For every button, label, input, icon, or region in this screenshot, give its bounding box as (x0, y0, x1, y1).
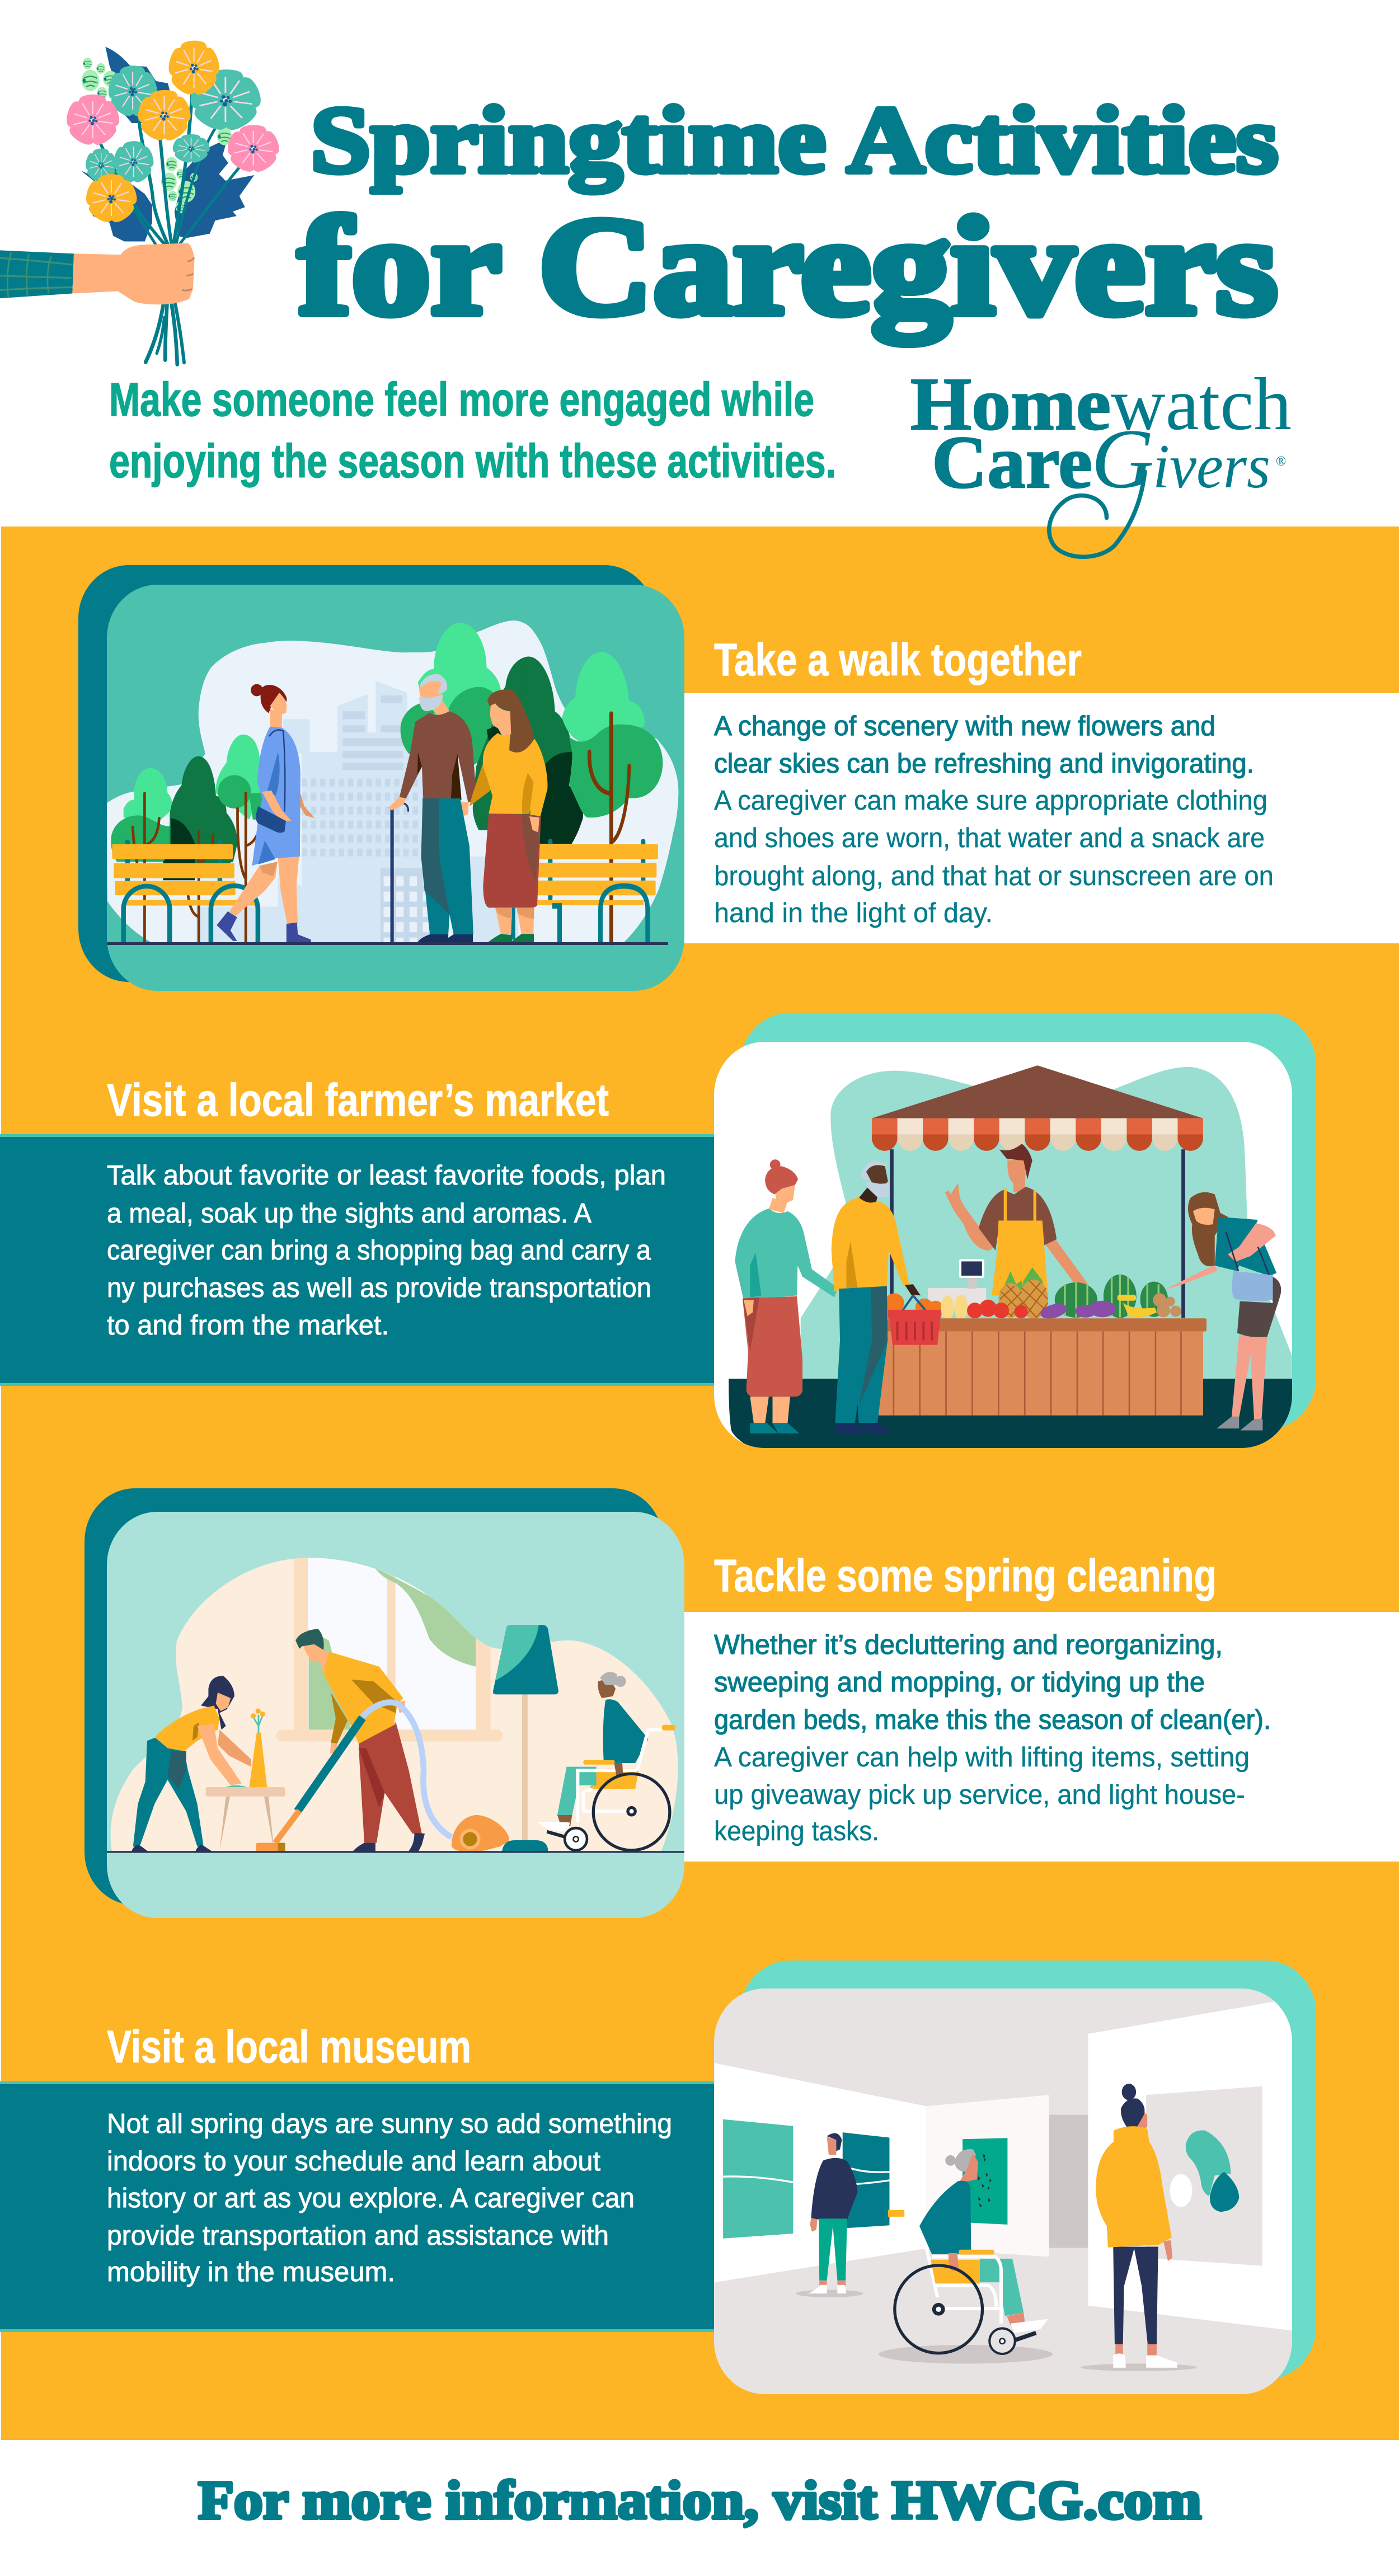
orange content band (1, 527, 1399, 2440)
bench right and woman in yellow (483, 689, 658, 943)
body text: mobility in the museum. (107, 2257, 395, 2287)
body text: indoors to your schedule and learn about (107, 2146, 600, 2177)
panel: take a walk together (78, 565, 684, 991)
body text: a meal, soak up the sights and aromas. A (107, 1198, 591, 1229)
man viewing paintings (796, 2133, 863, 2297)
body text (107, 1160, 666, 1341)
text band: tackle some spring cleaning (684, 1550, 1399, 1862)
basket (888, 1295, 941, 1345)
produce (885, 1267, 1181, 1321)
heading: Visit a local farmer’s market (107, 1075, 609, 1126)
back card (740, 1961, 1316, 2380)
body text: up giveaway pick up service, and light house- (714, 1780, 1245, 1810)
awning (872, 1118, 1203, 1151)
woman in yellow coat (1081, 2084, 1197, 2371)
buildings (196, 681, 518, 944)
body text: A caregiver can help with lifting items, setting (714, 1742, 1250, 1773)
trees right (rear) (504, 652, 663, 946)
title: for Caregivers (298, 189, 1278, 344)
flowers (64, 41, 281, 225)
heading: Tackle some spring cleaning (714, 1550, 1217, 1601)
logo: Homewatch CareGivers: Home (910, 363, 1111, 445)
back card (84, 1488, 663, 1905)
subtitle (109, 373, 836, 487)
body text: brought along, and that hat or sunscreen are on (714, 861, 1274, 891)
front card (714, 1042, 1292, 1448)
cash register (928, 1259, 986, 1310)
stems (100, 95, 240, 364)
vacuum cleaner (256, 1703, 509, 1851)
sleeve (0, 250, 74, 298)
panel: spring cleaning illustration (84, 1488, 686, 1918)
back card (740, 1013, 1316, 1430)
trees left (123, 768, 172, 822)
body text: clear skies can be refreshing and invigorating. (714, 749, 1254, 779)
text band: visit a local farmer's market (0, 1075, 714, 1386)
stall roof (872, 1065, 1203, 1118)
floor lamp (493, 1625, 558, 1851)
body text (714, 711, 1274, 928)
body text: ny purchases as well as provide transportation (107, 1273, 651, 1303)
window (276, 1548, 503, 1742)
panel: farmer's market illustration (714, 1013, 1316, 1453)
tree behind old man (417, 623, 501, 715)
illustration: park walk (106, 621, 678, 945)
floor line (106, 1851, 686, 1853)
body text: A caregiver can make sure appropriate clothing (714, 786, 1267, 816)
panel: museum illustration (714, 1961, 1316, 2394)
body text: and shoes are worn, that water and a snack are (714, 823, 1265, 853)
body text (714, 1630, 1271, 1846)
woman in blue dress (217, 684, 315, 943)
body text: Whether it’s decluttering and reorganizing, (714, 1630, 1223, 1660)
counter (879, 1318, 1206, 1416)
title: Springtime Activities (311, 87, 1278, 192)
logo: Homewatch CareGivers: ® (1276, 454, 1286, 469)
woman in wheelchair (537, 1672, 675, 1850)
body text: sweeping and mopping, or tidying up the (714, 1667, 1205, 1698)
body text: A change of scenery with new flowers and (714, 711, 1215, 741)
gallery walls (715, 2063, 926, 2282)
body text: Not all spring days are sunny so add something (107, 2109, 672, 2139)
subtitle: enjoying the season with these activities. (109, 435, 836, 487)
woman in wheelchair (879, 2149, 1053, 2363)
trees mid and buildings (111, 623, 521, 944)
illustration: bouquet held in hand (0, 41, 281, 364)
leaves (81, 47, 254, 242)
body text: to and from the market. (107, 1310, 389, 1341)
heading: Take a walk together (714, 634, 1082, 685)
poles (890, 1149, 894, 1318)
illustration: cleaning room (106, 1548, 686, 1853)
back card (78, 565, 655, 982)
sky blob (106, 621, 678, 943)
background blob (801, 1067, 1292, 1380)
front card (107, 1512, 684, 1918)
body text: history or art as you explore. A caregiver can (107, 2183, 635, 2213)
man in yellow (832, 1160, 921, 1433)
body text: Talk about favorite or least favorite foods, plan (107, 1160, 666, 1191)
woman bending (1164, 1192, 1281, 1430)
logo: Homewatch CareGivers: watch (1111, 363, 1292, 445)
body text (107, 2109, 672, 2287)
vendor (945, 1144, 1095, 1295)
illustration: market stall (729, 1065, 1295, 1453)
body text: keeping tasks. (714, 1816, 879, 1846)
wall blob (111, 1558, 678, 1851)
woman dusting (132, 1676, 251, 1851)
table and vase (206, 1709, 285, 1851)
woman in teal (735, 1159, 838, 1433)
heading: Visit a local museum (107, 2022, 471, 2072)
man vacuuming (295, 1629, 425, 1852)
logo: Homewatch CareGivers: Care (932, 421, 1092, 504)
hand (72, 243, 195, 304)
body text: provide transportation and assistance with (107, 2221, 609, 2251)
ground line (107, 942, 668, 945)
body text: caregiver can bring a shopping bag and carry a (107, 1235, 651, 1266)
title (298, 87, 1278, 344)
front card (107, 585, 684, 991)
body text: garden beds, make this the season of clean(er). (714, 1705, 1271, 1735)
paintings (723, 2086, 1262, 2266)
bench left (128, 842, 220, 882)
text band: take a walk together (684, 634, 1399, 943)
logo: Homewatch CareGivers: ivers (1153, 432, 1270, 501)
logo: Homewatch CareGivers: G (1091, 412, 1154, 506)
berries (82, 58, 232, 213)
front card (714, 1989, 1292, 2394)
body text: hand in the light of day. (714, 898, 993, 928)
logo: Homewatch CareGivers (910, 363, 1292, 557)
footer call to action: For more information, visit HWCG.com (198, 2470, 1201, 2531)
text band: visit a local museum (0, 2022, 714, 2332)
illustration: gallery (715, 1999, 1295, 2371)
ground (729, 1379, 1295, 1453)
old man with cane (388, 674, 491, 943)
subtitle: Make someone feel more engaged while (109, 373, 814, 426)
